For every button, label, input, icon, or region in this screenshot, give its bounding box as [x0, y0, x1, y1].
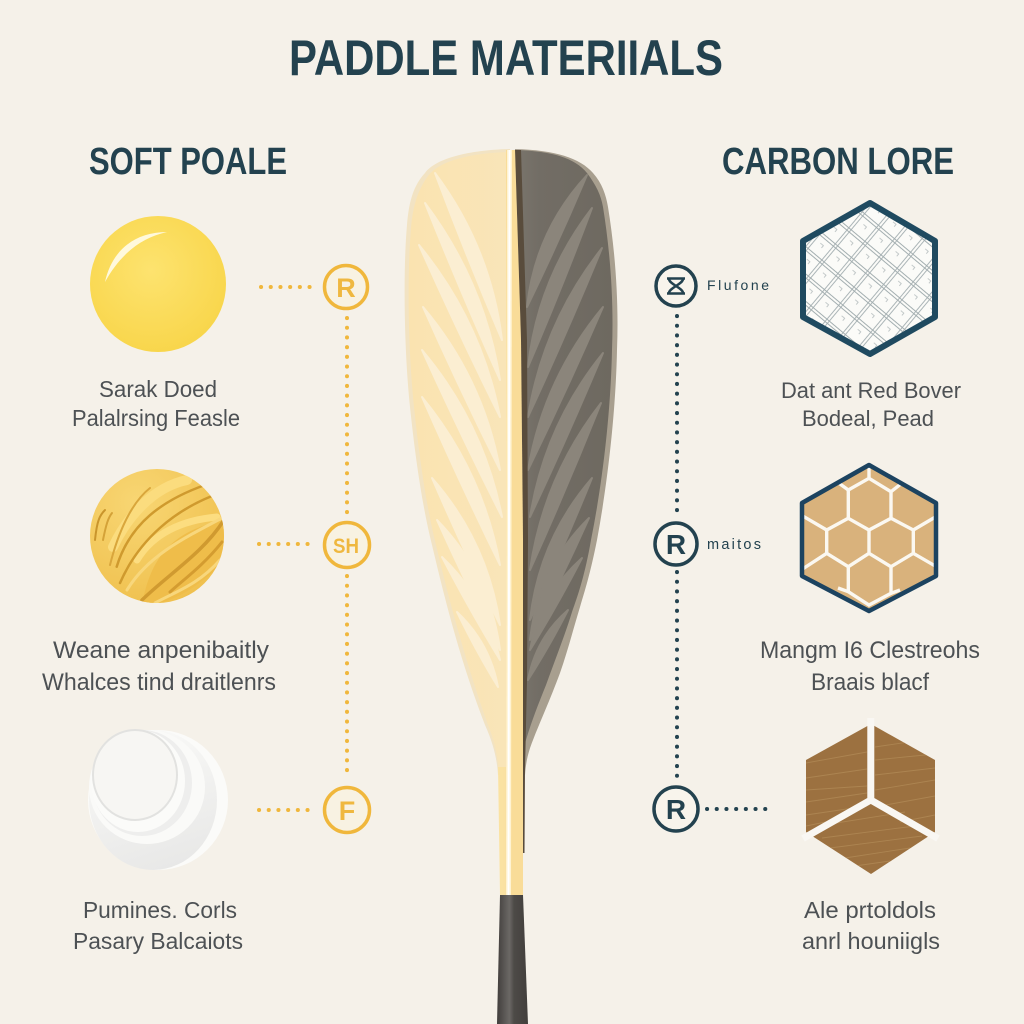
left connector dots: [259, 287, 347, 810]
right badge R lower: R: [666, 794, 686, 825]
title: PADDLE MATERIIALS: [289, 30, 723, 86]
left badge SH: SH: [333, 535, 359, 558]
label: flufone: Flufone: [707, 277, 769, 293]
material: honeycomb hexagon: [801, 460, 937, 611]
material: smooth yellow ball: [90, 216, 226, 352]
caption 6: [802, 897, 940, 954]
caption 4: Dat ant Red Bover: [781, 378, 961, 403]
caption 6: anrl houniigls: [802, 928, 940, 954]
right badge R middle: [655, 523, 697, 565]
heading: carbon lore: CARBON LORE: [722, 141, 954, 183]
caption 1: [72, 376, 240, 431]
caption 3: [73, 897, 243, 954]
paddle centre spine: [506, 150, 528, 895]
left badge F: F: [339, 796, 355, 826]
caption 4: [781, 378, 961, 431]
light feathers: [419, 173, 502, 687]
left badge R: R: [336, 273, 356, 303]
caption 5: Braais blacf: [811, 669, 929, 696]
material: white ball: [88, 730, 228, 870]
paddle blade: light half: [405, 149, 512, 775]
right badge R middle: R: [666, 529, 686, 560]
material: fibrous yellow ball: [90, 469, 226, 605]
label: maitos: maitos: [707, 537, 761, 553]
caption 2: [42, 637, 276, 696]
caption 2: Weane anpenibaitly: [53, 637, 269, 664]
heading: soft poale: SOFT POALE: [89, 141, 287, 183]
caption 5: [760, 637, 980, 696]
dark feathers: [527, 175, 603, 680]
caption 3: Pumines. Corls: [83, 897, 237, 923]
material: carbon weave hexagon: [803, 203, 935, 354]
left badge F: [324, 788, 370, 832]
material: wood cube: [803, 718, 938, 874]
right badge: hourglass: [656, 266, 696, 306]
paddle shaft: [498, 767, 523, 895]
caption 1: Palalrsing Feasle: [72, 405, 240, 431]
caption 3: Pasary Balcaiots: [73, 928, 243, 954]
left badge SH: [324, 522, 370, 568]
paddle grip: [497, 895, 528, 1024]
caption 1: Sarak Doed: [99, 376, 217, 402]
paddle: [405, 149, 618, 1024]
left badge R: [324, 266, 368, 308]
right badge R lower: [654, 787, 698, 831]
caption 2: Whalces tind draitlenrs: [42, 669, 276, 696]
caption 4: Bodeal, Pead: [802, 406, 934, 431]
caption 6: Ale prtoldols: [804, 897, 936, 923]
paddle blade: dark half: [515, 149, 618, 775]
right connector dots: [677, 316, 770, 809]
caption 5: Mangm I6 Clestreohs: [760, 637, 980, 664]
